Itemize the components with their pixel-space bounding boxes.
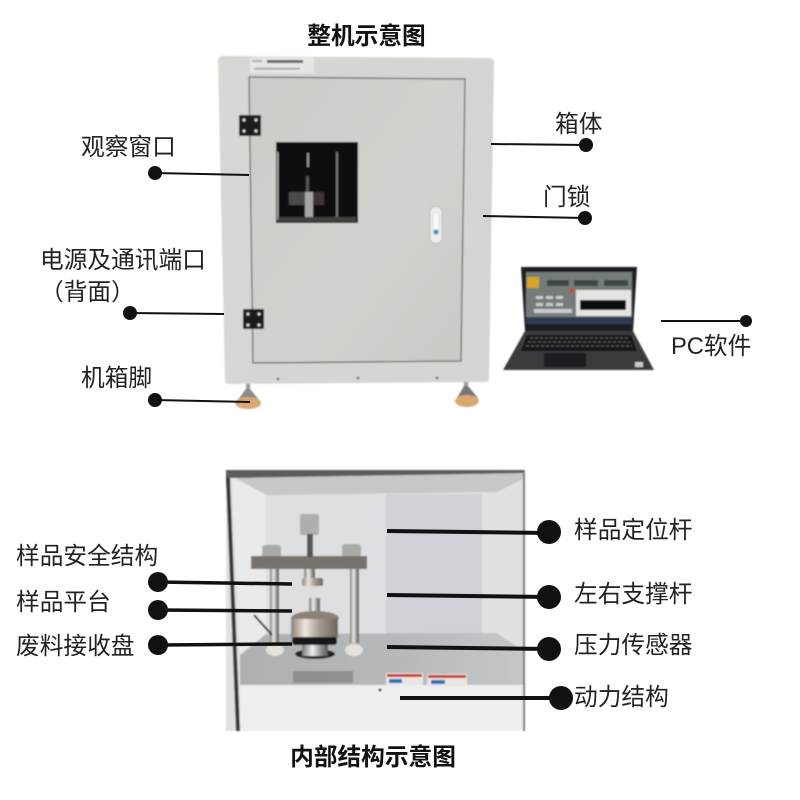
callout: 压力传感器: 压力传感器 [574,632,693,659]
back wall left [266,494,388,634]
sample platform [291,598,339,638]
crossbar [251,556,367,569]
machine cabinet photo [218,56,494,409]
right post [342,544,363,656]
cable [254,615,272,635]
product label [250,57,314,73]
lower housing [240,685,523,731]
bottom screws [276,376,438,380]
warning stickers [386,673,467,686]
title: internal structure: 内部结构示意图 [290,743,456,771]
icon: left foot [235,383,261,409]
callout: 动力结构 [400,684,669,711]
left edge [226,478,240,731]
callout: 废料接收盘 [16,633,292,660]
interior photo [226,470,525,731]
callout: 动力结构: 动力结构 [574,684,669,711]
callout: 观察窗口 [81,134,249,180]
laptop [503,267,654,370]
callout: 机箱脚: 机箱脚 [81,365,152,392]
callout: 观察窗口: 观察窗口 [81,134,176,161]
interior background [226,470,525,731]
back wall right shade [386,494,482,634]
side wall left [232,478,266,656]
icon: upper hinge [239,115,261,136]
callout: 箱体: 箱体 [555,111,603,138]
waste tray [292,637,337,659]
icon: lower hinge [243,309,264,329]
callout: 废料接收盘: 废料接收盘 [16,633,134,660]
callout: PC软件: PC软件 [671,333,751,360]
title: whole machine: 整机示意图 [307,22,426,50]
callout: PC软件 [661,315,752,360]
left post [262,545,284,656]
cabinet door [249,77,465,363]
callout: 样品平台: 样品平台 [16,589,111,616]
screw [378,688,382,692]
plate text [293,671,353,683]
callout: 箱体 [491,111,603,152]
positioning rod [300,514,323,586]
ceiling [232,470,525,495]
callout: 左右支撑杆 [387,581,692,609]
callout: 样品定位杆 [387,517,692,544]
laptop keyboard [503,331,654,370]
icon: right foot [455,381,479,407]
callout: 压力传感器 [387,632,693,661]
callout: 电源及通讯端口 [40,247,224,320]
callout: 左右支撑杆: 左右支撑杆 [574,581,692,608]
base plate [240,633,523,686]
callout: 门锁 [483,184,592,225]
callout: 机箱脚 [81,365,250,407]
door lock [430,207,442,243]
callout: 电源及通讯端口: （背面） [40,279,135,306]
observation window [276,142,358,223]
right edge [523,470,525,731]
callout: 电源及通讯端口: 电源及通讯端口 [40,247,206,274]
callout: 样品平台 [16,589,292,620]
callout: 门锁: 门锁 [543,184,590,211]
cabinet body [218,56,494,384]
callout: 样品安全结构 [16,543,292,592]
callout: 样品定位杆: 样品定位杆 [574,517,692,544]
callout: 样品安全结构: 样品安全结构 [16,543,158,570]
laptop screen [521,267,637,331]
